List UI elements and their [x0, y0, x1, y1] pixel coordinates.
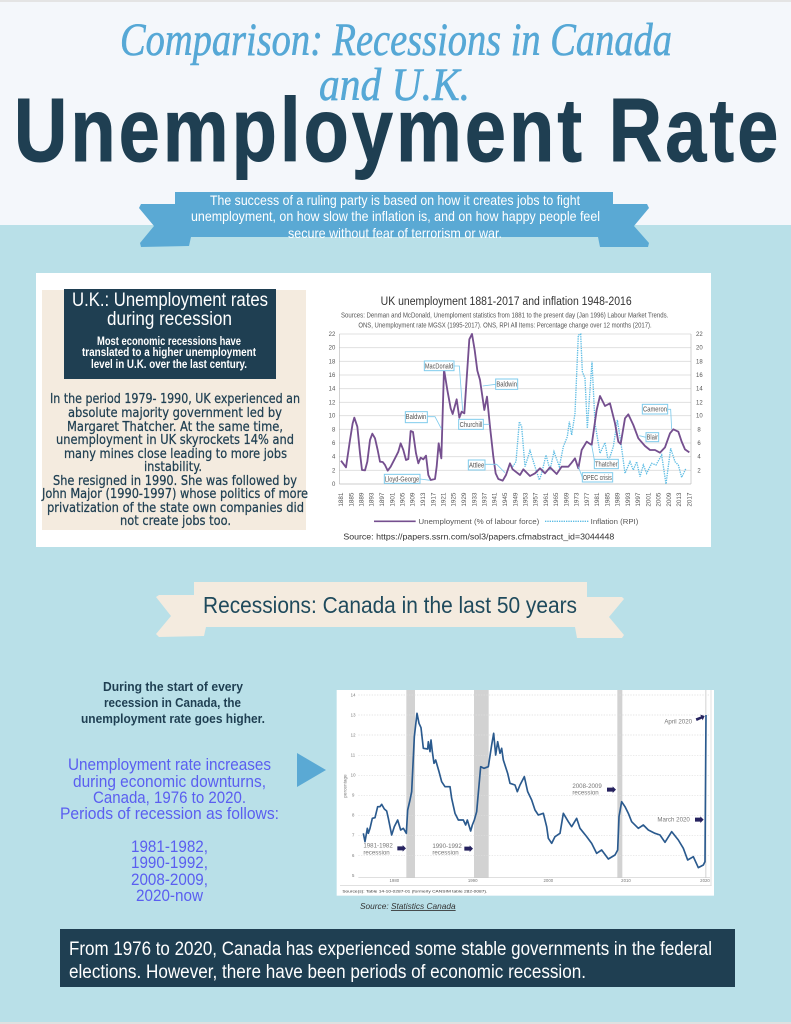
annotation: April 2020: April 2020	[664, 718, 693, 725]
left axis labels: 12	[329, 400, 336, 406]
left axis labels: 6	[332, 441, 336, 447]
y axis labels: percentage	[343, 774, 348, 798]
year axis labels: 1901	[389, 492, 396, 507]
year axis labels: 1885	[348, 492, 355, 507]
heading box: U.K. unemployment rates: Most economic recessions have	[97, 336, 241, 348]
year axis labels: 1897	[379, 492, 386, 507]
right axis labels	[696, 332, 703, 474]
callouts: political leaders	[384, 361, 672, 483]
year axis labels: 1969	[563, 492, 570, 507]
text block: Thatcher and Major: unemployment in UK skyrockets 14% and	[56, 433, 294, 448]
ribbon: intro statement: secure without fear of terrorism or war.	[288, 225, 502, 241]
callouts: political leaders: Cameron	[643, 407, 667, 414]
year axis labels: 1985	[604, 492, 611, 507]
left axis labels: 20	[329, 346, 336, 352]
y axis labels: 13	[351, 712, 356, 717]
left axis labels: 14	[329, 387, 336, 393]
right axis labels: 18	[696, 359, 703, 365]
ribbon: Recessions Canada heading: Recessions: Canada in the last 50 years	[203, 592, 577, 618]
year axis labels: 1929	[461, 492, 468, 507]
y axis labels: 14	[351, 692, 356, 697]
callouts: political leaders: MacDonald	[425, 363, 453, 370]
heading box: U.K. unemployment rates: translated to a higher unemployment	[82, 347, 256, 359]
text block: periods of recession: 1981-1982,	[131, 837, 208, 856]
year axis labels: 1949	[512, 492, 519, 507]
text block: periods of recession: Canada, 1976 to 2020.	[93, 788, 246, 807]
year axis labels: 1961	[543, 492, 550, 507]
x axis labels: 2010	[621, 878, 631, 883]
year axis labels: 1957	[533, 492, 540, 507]
line: inflation	[513, 334, 686, 484]
year axis labels: 1965	[553, 492, 560, 507]
left axis labels: 10	[329, 414, 336, 420]
text block: periods of recession	[60, 755, 279, 905]
chart: Canada unemployment rate	[337, 690, 714, 911]
year axis labels: 2017	[686, 492, 693, 507]
text block: Thatcher and Major: not create jobs too.	[120, 514, 231, 529]
year axis labels: 1889	[359, 492, 366, 507]
left axis labels: 2	[332, 468, 336, 474]
heading box: U.K. unemployment rates: level in U.K. over the last century.	[91, 359, 247, 371]
text block: Thatcher and Major	[41, 392, 308, 529]
text block: periods of recession: 1990-1992,	[131, 853, 208, 872]
left axis labels: 4	[332, 455, 336, 461]
callout: Canada conclusion	[60, 929, 735, 987]
callouts: political leaders: Attlee	[469, 462, 484, 469]
chart sources	[341, 311, 668, 330]
y axis labels: 8	[352, 813, 355, 818]
text block: periods of recession: Unemployment rate increases	[68, 755, 271, 774]
right axis labels: 16	[696, 373, 703, 379]
chart data source: Source(s): Table 14-10-0287-01 (formerly CANSIM table 282-0087).	[342, 890, 487, 894]
year axis labels: 1921	[440, 492, 447, 507]
left axis labels: 8	[332, 427, 336, 433]
year axis labels: 1933	[471, 492, 478, 507]
annotation: 1990-1992 recession: 1990-1992	[432, 843, 462, 850]
x axis labels: 2000	[544, 878, 554, 883]
year axis labels: 1989	[615, 492, 622, 507]
callout: Canada conclusion: elections. However, there have been periods of economic recession.	[69, 962, 586, 983]
text block: periods of recession: Periods of recession as follows:	[60, 804, 279, 823]
year axis labels: 1941	[492, 492, 499, 507]
right axis labels: 2	[697, 468, 701, 474]
right axis labels: 6	[697, 441, 701, 447]
title: comparison	[120, 14, 672, 111]
year axis labels: 1881	[338, 492, 345, 507]
arrow: points to Canada chart	[297, 753, 326, 787]
year axis labels	[338, 492, 693, 507]
chart: UK unemployment and inflation	[329, 294, 703, 541]
annotation: 1981-1982 recession: 1981-1982	[363, 843, 393, 850]
year axis labels: 1925	[451, 492, 458, 507]
heading box: U.K. unemployment rates: during recession	[107, 309, 232, 330]
year axis labels: 1909	[410, 492, 417, 507]
year axis labels: 1977	[584, 492, 591, 507]
panel: U.K. unemployment	[36, 273, 711, 547]
y axis labels: 12	[351, 732, 356, 737]
year axis labels: 1937	[481, 492, 488, 507]
year axis labels: 1905	[399, 492, 406, 507]
year axis labels: 1917	[430, 492, 437, 507]
chart source: Source: https://papers.ssrn.com/sol3/papers.cfmabstract_id=3044448	[343, 531, 615, 541]
text block: Thatcher and Major: In the period 1979- 1990, UK experienced an	[50, 392, 300, 407]
year axis labels: 1993	[625, 492, 632, 507]
x axis labels: 1990	[468, 878, 478, 883]
annotation: 2008-2009 recession: 2008-2009	[572, 783, 602, 790]
year axis labels: 1997	[635, 492, 642, 507]
callouts: political leaders: Lloyd-George	[385, 476, 419, 483]
text block: recession start	[81, 679, 265, 726]
year axis labels: 2013	[676, 492, 683, 507]
text block: periods of recession: 2008-2009,	[131, 870, 208, 889]
text block: Thatcher and Major: Margaret Thatcher. At the same time,	[67, 420, 283, 435]
line: unemployment	[341, 334, 689, 481]
y axis labels: 10	[351, 773, 356, 778]
right axis labels: 10	[696, 414, 703, 420]
left axis labels: 18	[329, 359, 336, 365]
ribbon: intro statement: The success of a ruling party is based on how it creates jobs to fight	[210, 192, 580, 208]
annotation: 1981-1982 recession: recession	[363, 849, 390, 856]
year axis labels: 1973	[574, 492, 581, 507]
y axis labels: 11	[351, 753, 356, 758]
callouts: political leaders: Blair	[647, 435, 659, 442]
ribbon: Recessions Canada heading	[156, 582, 624, 638]
y axis labels: 6	[352, 853, 355, 858]
x axis labels	[390, 878, 710, 883]
annotation: 2008-2009 recession: recession	[572, 789, 599, 796]
callout: Canada conclusion: From 1976 to 2020, Canada has experienced some stable governments in the federal	[69, 939, 712, 960]
x axis labels: 2020	[700, 878, 710, 883]
annotation: April 2020	[664, 715, 705, 725]
annotation: March 2020: March 2020	[657, 816, 690, 823]
year axis labels: 1893	[369, 492, 376, 507]
text block: Thatcher and Major: John Major (1990-1997) whose politics of more	[41, 487, 308, 502]
title: unemployment rate: Unemployment Rate	[14, 81, 778, 181]
ribbon: intro statement: unemployment, on how slow the inflation is, and on how happy people feel	[191, 208, 600, 224]
year axis labels: 1953	[522, 492, 529, 507]
chart sources: ONS, Unemployment rate MGSX (1995-2017). ONS, RPI All Items: Percentage change over 12 months (2017).	[358, 321, 652, 330]
text block: Thatcher and Major: many mines close leading to more jobs	[64, 447, 287, 462]
callouts: political leaders: Churchill	[460, 422, 483, 429]
callouts: political leaders: Thatcher	[595, 462, 618, 469]
x axis labels: 1980	[390, 878, 400, 883]
left axis labels: 16	[329, 373, 336, 379]
text block: recession start: unemployment rate goes higher.	[81, 711, 265, 726]
source: Statistics Canada: Source: Statistics Canada	[360, 901, 456, 911]
text block: Thatcher and Major: She resigned in 1990. She was followed by	[53, 474, 297, 489]
panel: U.K. text background	[42, 290, 306, 530]
left axis labels: 22	[329, 332, 336, 338]
chart legend: Inflation (RPI)	[591, 517, 638, 526]
text block: Thatcher and Major: privatization of the state own companies did	[47, 501, 304, 516]
right axis labels: 12	[696, 400, 703, 406]
right axis labels: 4	[697, 455, 701, 461]
text block: periods of recession: during economic downturns,	[73, 772, 266, 791]
left axis labels: 0	[332, 482, 336, 488]
y axis labels: 9	[352, 793, 355, 798]
right axis labels: 20	[696, 346, 703, 352]
ribbon: intro statement	[139, 192, 649, 247]
year axis labels: 2005	[656, 492, 663, 507]
text block: Thatcher and Major: absolute majority government led by	[68, 406, 282, 421]
chart legend	[374, 517, 638, 526]
y axis labels: 5	[352, 873, 355, 878]
right axis labels: 22	[696, 332, 703, 338]
year axis labels: 1945	[502, 492, 509, 507]
text block: recession start: recession in Canada, the	[104, 695, 241, 710]
year axis labels: 2009	[666, 492, 673, 507]
heading box: U.K. unemployment rates: U.K.: Unemployment rates	[72, 290, 268, 311]
year axis labels: 1981	[594, 492, 601, 507]
text block: Thatcher and Major: instability.	[144, 460, 202, 475]
title: comparison: Comparison: Recessions in Canada	[120, 14, 672, 66]
text block: recession start: During the start of every	[103, 679, 244, 694]
chart sources: Sources: Denman and McDonald, Unemploment statistics from 1881 to the present day (Jan 1996) Labour Market Trends.	[341, 311, 668, 320]
heading box: U.K. unemployment rates	[64, 289, 276, 379]
right axis labels: 14	[696, 387, 703, 393]
callouts: political leaders: Baldwin	[496, 382, 517, 389]
y axis labels	[343, 692, 356, 878]
text block: periods of recession: 2020-now	[136, 886, 204, 905]
annotation: 1990-1992 recession	[432, 843, 473, 856]
annotation: 2008-2009 recession	[572, 783, 616, 796]
line: unemployment rate	[363, 713, 706, 868]
y axis labels: 7	[352, 833, 355, 838]
right axis labels: 8	[697, 427, 701, 433]
left axis labels	[329, 332, 336, 488]
callouts: political leaders: Baldwin	[406, 414, 426, 421]
callouts: political leaders: OPEC crisis	[583, 475, 612, 482]
annotation: 1990-1992 recession: recession	[432, 849, 459, 856]
year axis labels: 2001	[645, 492, 652, 507]
chart title: UK unemployment 1881-2017 and inflation 1948-2016	[381, 294, 632, 308]
annotation: 1981-1982 recession	[363, 843, 406, 856]
year axis labels: 1913	[420, 492, 427, 507]
title: comparison: and U.K.	[319, 59, 470, 111]
chart legend: Unemployment (% of labour force)	[418, 517, 539, 526]
